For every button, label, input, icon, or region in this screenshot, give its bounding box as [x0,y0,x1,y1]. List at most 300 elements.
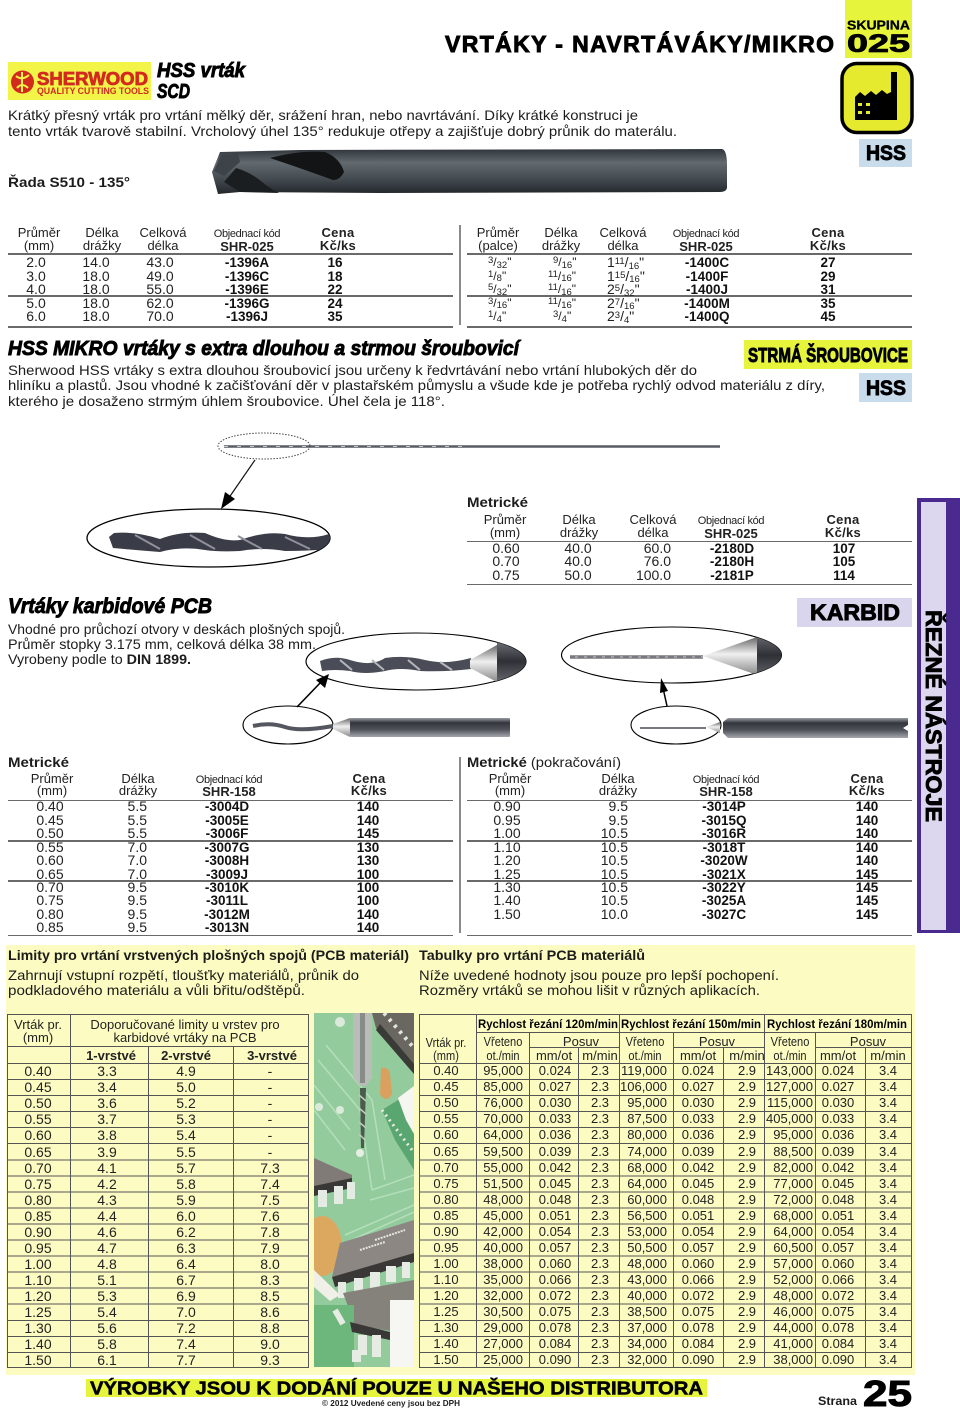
text block: intro [8,107,677,139]
table: cutting speeds: Vřeteno [771,1034,809,1048]
table: cutting speeds: 57,000 [773,1256,813,1271]
table: cutting speeds: 38,500 [627,1304,667,1319]
table: cutting speeds: 0.048 [822,1192,854,1207]
table: inch stub drills: 1/8" [488,269,506,284]
text block: limity: podkladového materiálu a vůli břitu/odštěpů. [8,982,305,998]
table: cutting speeds: 2.9 [738,1111,756,1126]
text block: intro: tento vrták tvarově stabilní. Vrcholový úhel 135° redukuje otřepy a zajišťuje dobrý průnik do materálu. [8,123,677,139]
table: layer limits: 4.4 [97,1208,117,1224]
table: cutting speeds: 2.3 [591,1304,609,1319]
table: cutting speeds: Rychlost řezání 150m/min [621,1017,761,1031]
table: cutting speeds: (mm) [433,1048,459,1063]
table: cutting speeds: m/min [729,1048,765,1062]
table: metric stub drills: 49.0 [146,268,174,284]
table: cutting speeds: 53,000 [627,1224,667,1239]
table: layer limits: 8.5 [260,1288,280,1304]
table: PCB drills continued: SHR-158 [699,784,753,799]
table: cutting speeds: 44,000 [773,1320,813,1335]
table: cutting speeds: 2.3 [591,1111,609,1126]
table: metric stub drills: 14.0 [82,254,110,270]
table: micro drills: 40.0 [564,553,592,569]
table: cutting speeds: 2.3 [591,1079,609,1094]
table: cutting speeds: 80,000 [627,1127,667,1142]
table: cutting speeds: 2.9 [738,1304,756,1319]
table: layer limits: 0.80 [24,1192,52,1208]
table: PCB drills metric: 100 [357,893,379,908]
table: cutting speeds: 143,000 [766,1063,813,1078]
table: inch stub drills: 29 [820,269,836,284]
table: layer limits [7,1014,309,1368]
table: PCB drills continued: 140 [856,840,878,855]
text block: tabulky: Rozměry vrtáků se mohou lišit v různých aplikacích. [419,982,760,998]
table: PCB drills continued: 140 [856,853,878,868]
group badge: skupina 025: SKUPINA [847,18,910,32]
table: cutting speeds: 48,000 [773,1288,813,1303]
table: cutting speeds: 106,000 [620,1079,667,1094]
table: PCB drills continued: 1.10 [493,839,521,855]
table: layer limits: 9.0 [260,1336,280,1352]
table: layer limits: 3.4 [97,1079,117,1095]
table: PCB drills metric: 0.75 [36,892,64,908]
table: cutting speeds: 2.3 [591,1144,609,1159]
table: PCB drills continued: drážky [599,783,637,798]
table: layer limits: 7.0 [176,1304,196,1320]
table: cutting speeds: Rychlost řezání 180m/min [767,1017,907,1031]
table: cutting speeds: mm/ot [536,1048,572,1062]
badge: HSS top [859,139,912,167]
table: cutting speeds: 2.9 [738,1336,756,1351]
table: cutting speeds: 95,000 [483,1063,523,1078]
table: PCB drills continued: Délka [601,771,635,786]
table: metric stub drills: 16 [327,255,343,270]
table: cutting speeds: 50,500 [627,1240,667,1255]
table: layer limits: 4.8 [97,1256,117,1272]
table: layer limits: 5.8 [176,1176,196,1192]
table: metric stub drills: 35 [327,309,343,324]
table: metric stub drills: 22 [327,282,343,297]
table: layer limits: 6.4 [176,1256,196,1272]
table: layer limits: - [268,1111,272,1127]
table: cutting speeds: 0.045 [682,1176,714,1191]
table: inch stub drills: 3/4" [553,309,571,325]
table: PCB drills continued: Kč/ks [849,783,885,798]
badge: karbid: KARBID [810,600,900,625]
table: cutting speeds: 0.084 [822,1336,854,1351]
table: layer limits: - [268,1095,272,1111]
heading: HSS vrták SCD: SCD [157,81,190,103]
table: PCB drills metric: 0.65 [36,866,64,882]
table: layer limits: 7.8 [260,1224,280,1240]
panel: yellow background [6,945,915,1375]
table: micro drills: Celková [630,512,676,527]
table: PCB drills metric: -3013N [205,920,249,935]
text block: limity: Zahrnují vstupní rozpětí, tloušťky materiálů, průnik do [8,967,359,983]
table: inch stub drills: 3/32" [488,255,511,271]
table: cutting speeds: Posuv [850,1034,886,1048]
table: cutting speeds: 41,000 [773,1336,813,1351]
side tab: řezné nástroje: ŘEZNÉ NÁSTROJE [921,610,946,822]
table: layer limits: 9.3 [260,1352,280,1368]
table: cutting speeds: ot./min [773,1048,807,1062]
table: metric stub drills: 18.0 [82,295,110,311]
table: metric stub drills: -1396A [225,255,269,270]
table: inch stub drills: délka [607,238,639,253]
badge: strmá šroubovice [744,340,912,369]
text block: tabulky [419,947,779,998]
table: PCB drills metric: Průměr [31,771,73,786]
table: cutting speeds: 0.042 [539,1160,571,1175]
table: cutting speeds: 2.9 [738,1208,756,1223]
table: cutting speeds: 3.4 [879,1224,897,1239]
table: cutting speeds: 32,000 [483,1288,523,1303]
table: cutting speeds: 2.3 [591,1192,609,1207]
table: layer limits: 0.50 [24,1095,52,1111]
table: layer limits: 8.6 [260,1304,280,1320]
table: PCB drills continued: 145 [856,867,878,882]
table: inch stub drills: 45 [820,309,836,324]
table: PCB drills metric: 0.55 [36,839,64,855]
table: PCB drills continued: -3018T [703,840,745,855]
table: layer limits: 3.6 [97,1095,117,1111]
table: cutting speeds: 64,000 [773,1224,813,1239]
table: metric stub drills: Délka [85,225,119,240]
table: layer limits: Vrták pr. [14,1016,62,1032]
table: micro drills: -2180H [710,554,754,569]
table: layer limits: 0.85 [24,1208,52,1224]
table: cutting speeds: 2.3 [591,1224,609,1239]
table: layer limits: 3.3 [97,1063,117,1079]
table: PCB drills metric: 0.45 [36,812,64,828]
table: cutting speeds: 3.4 [879,1208,897,1223]
table: cutting speeds: 3.4 [879,1160,897,1175]
table: PCB drills continued: -3016R [702,826,746,841]
table: cutting speeds: 68,000 [627,1160,667,1175]
logo: Sherwood: QUALITY CUTTING TOOLS [37,86,149,97]
table: cutting speeds: 0.024 [822,1063,854,1078]
table: PCB drills metric: Objednací kód [196,774,262,786]
table: layer limits: 8.0 [260,1256,280,1272]
table: cutting speeds: 3.4 [879,1176,897,1191]
table: metric stub drills: 4.0 [26,281,46,297]
table: cutting speeds: 0.075 [682,1304,714,1319]
heading: metrické left: Metrické [8,754,69,770]
table: inch stub drills: -1400Q [684,309,730,324]
table: PCB drills continued: -3022Y [702,880,746,895]
table: cutting speeds [419,1014,912,1368]
table: cutting speeds: 0.066 [822,1272,854,1287]
table: layer limits: - [268,1063,272,1079]
table: layer limits: 5.1 [97,1272,117,1288]
table: cutting speeds: 0.033 [682,1111,714,1126]
table: cutting speeds: 2.3 [591,1160,609,1175]
text block: tabulky: Tabulky pro vrtání PCB materiálů [419,947,645,963]
table: PCB drills metric: 0.50 [36,825,64,841]
table: cutting speeds: 60,500 [773,1240,813,1255]
table: cutting speeds: 0.057 [539,1240,571,1255]
table: cutting speeds: 0.048 [682,1192,714,1207]
table: cutting speeds: 0.057 [822,1240,854,1255]
table: PCB drills continued: Průměr [489,771,531,786]
table: cutting speeds: 0.054 [682,1224,714,1239]
table: PCB drills continued: 10.5 [601,892,628,908]
table: metric stub drills: -1396G [224,296,270,311]
table: micro drills: Průměr [484,512,526,527]
table: PCB drills metric: 130 [357,840,379,855]
table: PCB drills continued: 145 [856,893,878,908]
table: layer limits: 8.8 [260,1320,280,1336]
table: cutting speeds: 2.9 [738,1144,756,1159]
table: cutting speeds: 0.090 [539,1352,571,1367]
table: cutting speeds: 2.9 [738,1240,756,1255]
table: PCB drills continued: -3014P [702,799,746,814]
table: inch stub drills: 111/16" [607,254,644,272]
table: cutting speeds: ot./min [628,1048,662,1062]
text block: intro: Krátký přesný vrták pro vrtání mělký děr, srážení hran, nebo navrtávání. Díky krátké konstruci je [8,107,638,123]
table: PCB drills metric: 9.5 [128,879,147,895]
table: cutting speeds: 0.036 [822,1127,854,1142]
table: PCB drills metric: -3012M [204,907,250,922]
table: cutting speeds: m/min [870,1048,906,1062]
table: PCB drills metric: 140 [357,920,379,935]
table: PCB drills continued: Cena [850,771,883,786]
table: PCB drills metric: 7.0 [128,839,147,855]
table: micro drills: 50.0 [564,567,592,583]
image: PCB drill left [243,633,529,744]
table: PCB drills metric: Kč/ks [351,783,387,798]
table: PCB drills metric: 100 [357,880,379,895]
table: micro drills: 114 [833,568,855,583]
table: layer limits: 0.90 [24,1224,52,1240]
table: cutting speeds: 1.25 [433,1304,459,1319]
table: cutting speeds: 0.084 [539,1336,571,1351]
table: cutting speeds: 68,000 [773,1208,813,1223]
table: PCB drills metric [8,771,453,936]
table: layer limits: - [268,1144,272,1160]
table: inch stub drills: SHR-025 [679,239,733,254]
table: layer limits: 6.0 [176,1208,196,1224]
table: cutting speeds: 1.00 [433,1256,459,1271]
table: cutting speeds: 0.090 [822,1352,854,1367]
table: cutting speeds: Posuv [563,1034,599,1048]
table: cutting speeds: 95,000 [773,1127,813,1142]
table: cutting speeds: 72,000 [773,1192,813,1207]
table: cutting speeds: 0.075 [539,1304,571,1319]
table: layer limits: 3-vrstvé [247,1048,297,1062]
table: PCB drills continued: 140 [856,826,878,841]
table: layer limits: 6.3 [176,1240,196,1256]
image: micro drill with magnifier [87,433,720,567]
table: cutting speeds: 3.4 [879,1144,897,1159]
table: layer limits: 3.8 [97,1127,117,1143]
table: cutting speeds: 38,000 [773,1352,813,1367]
table: inch stub drills: Délka [544,225,578,240]
table: PCB drills continued: 1.25 [493,866,521,882]
table: cutting speeds: 1.10 [433,1272,459,1287]
table: metric stub drills: drážky [83,238,121,253]
text block: micro description [8,362,825,409]
table: cutting speeds: 2.9 [738,1176,756,1191]
table: cutting speeds: 0.042 [822,1160,854,1175]
table: layer limits: 0.40 [24,1063,52,1079]
heading: karbidové PCB: Vrtáky karbidové PCB [8,595,212,618]
table: inch stub drills: Kč/ks [810,238,846,253]
table: inch stub drills: 11/16" [548,282,576,298]
table: cutting speeds: 0.042 [682,1160,714,1175]
table: PCB drills metric: -3005E [205,813,249,828]
table: PCB drills metric: -3009J [206,867,248,882]
table: layer limits: 1.50 [24,1352,52,1368]
table: cutting speeds: 0.078 [539,1320,571,1335]
table: cutting speeds: 2.3 [591,1288,609,1303]
table: cutting speeds: 0.039 [822,1144,854,1159]
copyright: © 2012 Uvedené ceny jsou bez DPH [322,1398,460,1408]
table: cutting speeds: 0.033 [539,1111,571,1126]
table: cutting speeds: 0.051 [822,1208,854,1223]
table: PCB drills metric: -3008H [205,853,249,868]
table: cutting speeds: 0.95 [433,1240,459,1255]
table: cutting speeds: 0.051 [539,1208,571,1223]
image: PCB photo [314,1013,414,1367]
table: metric stub drills: 43.0 [146,254,174,270]
table: metric stub drills: 3.0 [26,268,46,284]
table: PCB drills continued: 10.5 [601,879,628,895]
table: cutting speeds: 64,000 [483,1127,523,1142]
table: cutting speeds: 0.072 [539,1288,571,1303]
table: PCB drills continued: 10.5 [601,839,628,855]
table: inch stub drills: 23/4" [607,308,634,326]
table: PCB drills continued: -3021X [702,867,746,882]
table: inch stub drills: Objednací kód [673,228,739,240]
table: cutting speeds: 3.4 [879,1240,897,1255]
table: metric stub drills: 18.0 [82,308,110,324]
table: cutting speeds: 48,000 [483,1192,523,1207]
table: layer limits: 5.5 [176,1144,196,1160]
table: cutting speeds: 87,500 [627,1111,667,1126]
group badge: skupina 025 [845,0,912,58]
table: cutting speeds: 88,500 [773,1144,813,1159]
heading: HSS vrták SCD [157,60,246,103]
table: cutting speeds: 55,000 [483,1160,523,1175]
logo: Sherwood [8,62,151,100]
table: PCB drills metric: 0.80 [36,906,64,922]
table: metric stub drills: 2.0 [26,254,46,270]
page number [818,1373,912,1410]
table: cutting speeds: 3.4 [879,1336,897,1351]
table: cutting speeds: 0.75 [433,1176,459,1191]
table: cutting speeds: 2.9 [738,1352,756,1367]
table: layer limits: 8.3 [260,1272,280,1288]
text block: tabulky: Níže uvedené hodnoty jsou pouze pro lepší pochopení. [419,967,779,983]
table: layer limits: 7.5 [260,1192,280,1208]
table: micro drills: Délka [562,512,596,527]
table: cutting speeds: 0.65 [433,1144,459,1159]
table: layer limits: - [268,1079,272,1095]
table: micro drills: 76.0 [644,553,671,569]
table: cutting speeds: 2.9 [738,1095,756,1110]
table: cutting speeds: 59,500 [483,1144,523,1159]
table: cutting speeds: 3.4 [879,1288,897,1303]
table: metric stub drills: 24 [327,296,343,311]
table: layer limits: 0.55 [24,1111,52,1127]
image: PCB drill right [562,627,908,744]
table: PCB drills metric: -3006F [206,826,248,841]
heading: metrické 0.60: Metrické [467,494,528,510]
table: cutting speeds: 0.85 [433,1208,459,1223]
table: PCB drills continued: 1.50 [493,906,521,922]
table: PCB drills metric: 0.85 [36,919,64,935]
table: layer limits: 1.10 [24,1272,52,1288]
table: layer limits: 5.7 [176,1160,196,1176]
table: cutting speeds: 74,000 [627,1144,667,1159]
table: cutting speeds: 3.4 [879,1192,897,1207]
table: cutting speeds: 0.045 [822,1176,854,1191]
table: PCB drills metric: 7.0 [128,852,147,868]
table: metric stub drills: 18.0 [82,281,110,297]
table: layer limits: 1.00 [24,1256,52,1272]
table: layer limits: 7.3 [260,1160,280,1176]
table: layer limits: 7.9 [260,1240,280,1256]
table: cutting speeds: 3.4 [879,1127,897,1142]
table: cutting speeds: 2.9 [738,1288,756,1303]
icon: factory [842,64,912,132]
table: PCB drills continued: 140 [856,799,878,814]
text block: micro description: kterého je dosaženo strmým úhlem šroubovice. Úhel čela je 118°. [8,393,445,409]
table: layer limits: 0.75 [24,1176,52,1192]
table: cutting speeds: 45,000 [483,1208,523,1223]
text block: PCB description: Vhodné pro průchozí otvory v deskách plošných spojů. [8,621,345,637]
table: cutting speeds: 0.55 [433,1111,459,1126]
table: cutting speeds: 2.3 [591,1127,609,1142]
table: cutting speeds: 0.60 [433,1127,459,1142]
table: cutting speeds: 0.80 [433,1192,459,1207]
table: inch stub drills: -1400M [684,296,730,311]
table: PCB drills continued: (mm) [495,783,525,798]
table: PCB drills metric: drážky [119,783,157,798]
table: cutting speeds: 2.9 [738,1272,756,1287]
table: cutting speeds: 37,000 [627,1320,667,1335]
table: cutting speeds: 0.060 [682,1256,714,1271]
table: metric stub drills: 5.0 [26,295,46,311]
table: PCB drills continued: -3027C [702,907,746,922]
heading: HSS vrták SCD: HSS vrták [157,60,246,82]
table: PCB drills continued: 140 [856,813,878,828]
table: cutting speeds: 35,000 [483,1272,523,1287]
table: cutting speeds: 0.072 [822,1288,854,1303]
table: metric stub drills: 62.0 [146,295,174,311]
badge: karbid [797,598,912,627]
table: PCB drills metric: 9.5 [128,919,147,935]
table: PCB drills metric: 5.5 [128,798,147,814]
table: PCB drills metric: 9.5 [128,892,147,908]
table: cutting speeds: 40,000 [627,1288,667,1303]
table: PCB drills continued [467,771,912,936]
table: cutting speeds: 0.084 [682,1336,714,1351]
table: cutting speeds: 3.4 [879,1095,897,1110]
table: inch stub drills: Celková [600,225,646,240]
table: cutting speeds: 46,000 [773,1304,813,1319]
table: metric stub drills: 55.0 [146,281,174,297]
table: layer limits: 7.7 [176,1352,196,1368]
table: cutting speeds: 0.036 [539,1127,571,1142]
table: cutting speeds: mm/ot [680,1048,716,1062]
page number: Strana [818,1394,857,1408]
table: cutting speeds: 0.060 [539,1256,571,1271]
table: micro drills: (mm) [490,525,520,540]
table: layer limits: 1.25 [24,1304,52,1320]
table: cutting speeds: 1.20 [433,1288,459,1303]
table: layer limits: 0.70 [24,1160,52,1176]
table: cutting speeds: 0.090 [682,1352,714,1367]
